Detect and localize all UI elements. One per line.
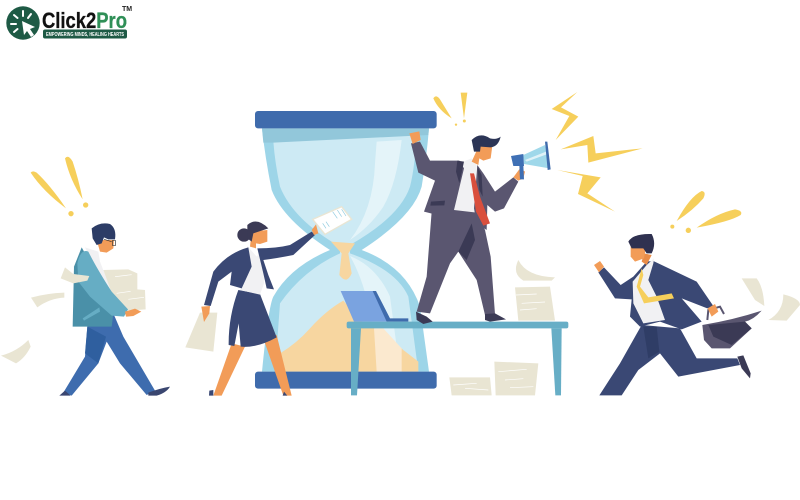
flying papers [1, 267, 89, 363]
hourglass caps [255, 111, 437, 389]
skirt [229, 290, 277, 347]
exclamation marks above left man [31, 157, 88, 216]
shirt [633, 258, 665, 323]
logo: Click2Pro [6, 6, 132, 40]
logo tagline pill: EMPOWERING MINDS, HEALING HEARTS [46, 32, 125, 38]
shoes [59, 387, 170, 396]
hair [237, 222, 268, 242]
raised fist [409, 131, 421, 144]
exclamation marks above man with megaphone [433, 93, 467, 126]
shoe [737, 355, 751, 378]
red tie [470, 173, 490, 226]
desk with laptop and papers [341, 260, 568, 395]
megaphone [511, 142, 551, 181]
legs [213, 335, 292, 396]
laptop [341, 291, 408, 322]
documents in hand [185, 313, 217, 352]
shoes [416, 312, 506, 324]
blouse [240, 246, 264, 295]
teal jacket [73, 247, 113, 327]
trousers [63, 313, 155, 396]
trademark mark: TM [122, 6, 132, 13]
icon: logo cursor badge [6, 6, 40, 40]
head [472, 143, 493, 165]
neck [642, 253, 652, 265]
suit jacket [411, 142, 518, 230]
flying papers [742, 278, 800, 321]
fist [594, 261, 604, 272]
lightning bolts from megaphone [552, 92, 643, 212]
hand [708, 304, 718, 317]
paper held to hourglass [312, 207, 352, 235]
shoes [209, 390, 287, 396]
desk [347, 322, 568, 395]
hourglass [255, 111, 437, 389]
shirt [85, 247, 112, 292]
head [97, 240, 114, 253]
figure: man carrying paper stack [1, 223, 170, 396]
paper stack [103, 269, 146, 311]
suit jacket [598, 261, 713, 329]
logo wordmark: Click2Pro [42, 8, 127, 33]
figure: man with megaphone [409, 131, 551, 324]
hair [628, 234, 654, 253]
sand pile [280, 301, 418, 372]
trousers [417, 208, 495, 315]
briefcase [702, 307, 762, 348]
head [250, 230, 267, 248]
hair [92, 223, 115, 245]
exclamation marks above running man [670, 191, 741, 233]
hand [201, 306, 210, 322]
yellow tie [637, 268, 674, 303]
hand [125, 309, 141, 317]
glasses [104, 239, 116, 245]
figure: man running with briefcase [594, 234, 800, 395]
falling sand [331, 242, 355, 280]
shirt [454, 158, 477, 213]
head [631, 243, 647, 262]
paper stacks [449, 260, 555, 395]
blazer [204, 232, 315, 306]
hair [472, 135, 501, 152]
figure: woman with documents [185, 222, 315, 396]
trousers [599, 325, 740, 395]
